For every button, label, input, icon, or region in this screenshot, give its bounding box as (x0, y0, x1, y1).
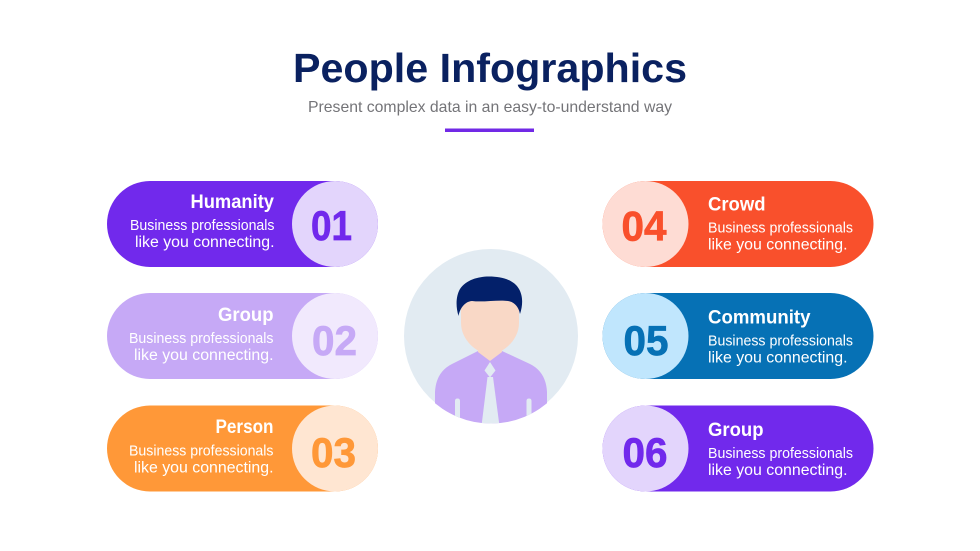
number circle 03 (292, 406, 378, 492)
description: like you connecting. (135, 234, 274, 251)
description (708, 220, 853, 254)
number circle 01 (292, 181, 378, 267)
number circle 05 (602, 293, 688, 379)
description (129, 330, 274, 364)
number 06: 06 (622, 429, 668, 476)
panel: 03 Person (107, 406, 378, 492)
description: like you connecting. (708, 350, 848, 366)
icon: person avatar (404, 249, 578, 430)
description: Business professionals (129, 330, 274, 347)
description (708, 332, 853, 366)
heading: Humanity: Humanity (190, 191, 274, 213)
heading: Community: Community (708, 306, 811, 328)
panel: 01 Humanity (107, 181, 378, 267)
subtitle: Present complex data in an easy-to-understand way (308, 99, 672, 116)
number circle 04 (602, 181, 688, 267)
title accent bar (445, 128, 534, 132)
panel: 06 Group (602, 406, 874, 492)
title: People Infographics (293, 45, 687, 91)
description (130, 217, 274, 251)
description: like you connecting. (708, 236, 848, 254)
number 04: 04 (622, 202, 667, 250)
panel: 05 Community (602, 293, 874, 379)
description: Business professionals (708, 220, 853, 236)
description: like you connecting. (134, 347, 274, 364)
number 02: 02 (312, 317, 357, 364)
panel: 04 Crowd (602, 181, 874, 267)
panel: 02 Group (107, 293, 378, 379)
description: Business professionals (130, 217, 274, 234)
description: like you connecting. (708, 462, 848, 479)
heading: Group: Group (218, 304, 274, 326)
number 05: 05 (624, 317, 668, 364)
description: like you connecting. (134, 460, 274, 476)
heading: Person: Person (216, 416, 274, 438)
description (129, 442, 274, 476)
number circle 06 (602, 406, 688, 492)
heading: Crowd: Crowd (708, 194, 766, 216)
number 01: 01 (311, 202, 352, 249)
description: Business professionals (708, 332, 853, 350)
description: Business professionals (708, 445, 853, 462)
heading: Group: Group (708, 419, 764, 441)
description: Business professionals (129, 442, 274, 460)
description (708, 445, 853, 479)
number circle 02 (292, 293, 378, 379)
number 03: 03 (311, 429, 356, 476)
